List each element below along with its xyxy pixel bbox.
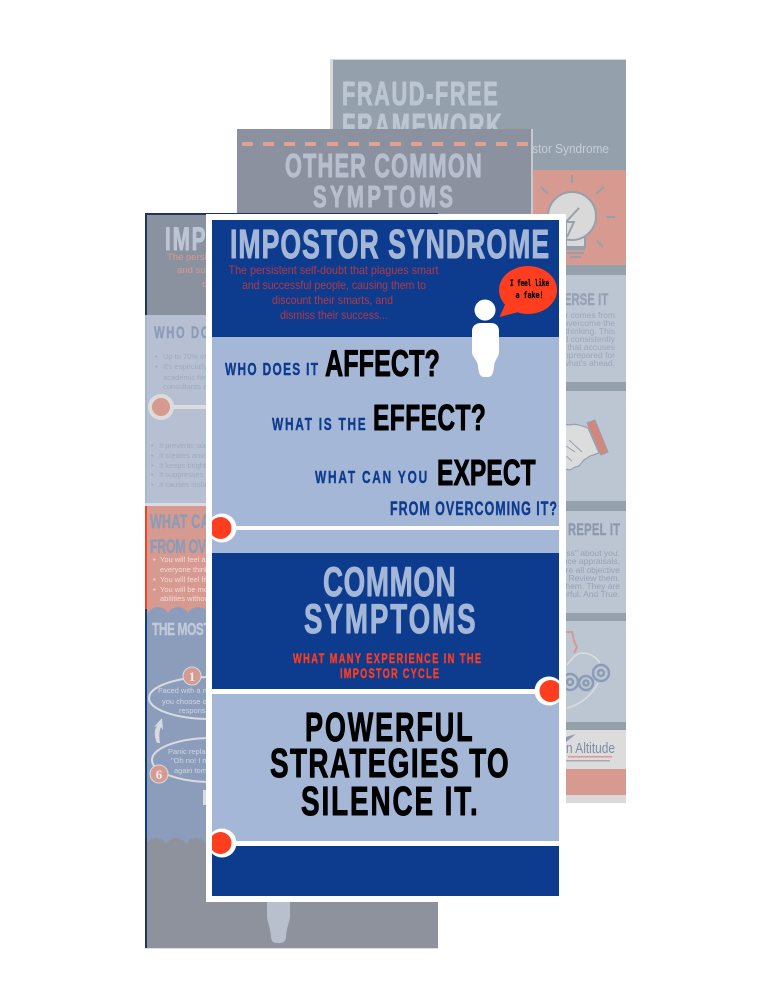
text block: reverse it: that accuses xyxy=(567,342,615,352)
question: who does it affect: WHO DOES IT xyxy=(225,360,319,380)
text block: repel it: re all objective xyxy=(566,565,620,575)
text block: definition: dismiss their success... xyxy=(280,308,388,322)
heading: fraud-free framework xyxy=(342,75,502,144)
text block: effect bullets: • xyxy=(151,470,154,479)
text block: reverse it: or comes from xyxy=(561,310,615,320)
text block: expect bullets: • xyxy=(153,575,156,584)
heading: powerful strategies: STRATEGIES TO xyxy=(270,741,509,786)
back page: fraud-free framework xyxy=(330,59,626,803)
text block: affect bullets: It's especially prevalent xyxy=(163,362,241,371)
panel: faded impostor cycle: THE MOST COMMON xyxy=(152,620,267,640)
text block: affect bullets: • xyxy=(155,352,158,361)
panel: faded what can you expect xyxy=(145,506,438,615)
title: IMPOSTOR SYNDROME xyxy=(230,222,549,267)
panel: reverse it: ERSE IT xyxy=(564,291,608,310)
text block: effect bullets: It suppresses xyxy=(159,470,204,479)
front page: impostor syndrome card xyxy=(206,214,566,902)
logo: altitude xyxy=(333,730,626,769)
icon: lightbulb xyxy=(541,175,615,257)
text block: effect bullets: It keeps bright xyxy=(159,461,207,470)
panel: faded what can you expect: WHAT CAN YOU xyxy=(150,511,250,533)
panel: faded who does it affect: WHO DOES IT xyxy=(154,324,246,343)
text block: effect bullets: • xyxy=(151,461,154,470)
text block: expect bullets xyxy=(153,555,215,603)
cycle step 6: "Oh no! I must xyxy=(171,756,220,765)
text block: reverse it: thinking. This xyxy=(565,326,615,336)
cycle step 6: again tomorrow xyxy=(174,766,226,775)
timeline marker: first xyxy=(212,514,236,542)
timeline marker xyxy=(148,394,221,420)
panel: faded footer xyxy=(145,838,438,948)
logo: altitude: n Altitude xyxy=(566,740,615,757)
panel: handshake xyxy=(333,391,626,501)
heading: fraud-free framework: FRAMEWORK xyxy=(342,107,502,144)
text block: reverse it xyxy=(561,310,616,368)
text block: repel it: erful. And True. xyxy=(562,589,620,599)
question: what can you expect: FROM OVERCOMING IT? xyxy=(390,498,557,520)
panel: repel it: REPEL IT xyxy=(568,521,620,540)
panel: common symptoms xyxy=(212,553,559,689)
panel: faded header: The persistent self-doubt xyxy=(167,252,272,263)
heading: common symptoms: SYMPTOMS xyxy=(304,595,476,642)
text block: reverse it: what's ahead. xyxy=(562,358,615,368)
cycle step 1: you choose one xyxy=(162,697,215,706)
text block: expect bullets: You will be more xyxy=(160,585,215,594)
question: who does it affect xyxy=(225,342,440,384)
text block: affect bullets: consultants and xyxy=(163,382,216,391)
panel: faded impostor cycle xyxy=(145,607,438,846)
text block: definition: discount their smarts, and xyxy=(272,293,393,307)
text block: effect bullets: It creates anxiety xyxy=(159,451,216,460)
icon: person xyxy=(472,300,499,377)
band: lightbulb xyxy=(333,170,626,265)
text block: affect bullets: academic fields xyxy=(163,373,215,382)
cycle step 6 xyxy=(150,738,272,783)
panel: faded what can you expect: FROM OVERCOMING xyxy=(150,536,272,558)
icon: faded figure xyxy=(267,895,290,943)
text block: expect bullets: everyone thinks xyxy=(160,565,213,574)
text block: effect bullets: • xyxy=(151,441,154,450)
text block: reverse it: nprepared for xyxy=(564,350,615,360)
arrow xyxy=(154,718,163,743)
cycle step 6: 6 xyxy=(156,767,163,782)
text block: repel it: n. Review them. xyxy=(559,573,620,583)
callout: speech bubble xyxy=(499,266,557,317)
text block: expect bullets: You will feel as xyxy=(160,555,210,564)
text block: definition: The persistent self-doubt that plagues smart xyxy=(228,263,439,277)
text block: repel it xyxy=(559,548,620,599)
icon: heart with swirls xyxy=(562,632,609,708)
text block: definition xyxy=(228,263,439,322)
text block: affect bullets: • xyxy=(155,362,158,371)
panel: faded header xyxy=(145,213,438,315)
question: who does it affect: AFFECT? xyxy=(325,342,440,384)
text block: effect bullets xyxy=(151,441,223,489)
heading: other common symptoms: OTHER COMMON xyxy=(285,147,482,184)
cycle step 1 xyxy=(149,667,271,719)
panel: header xyxy=(212,220,559,337)
callout: speech bubble: a fake! xyxy=(516,291,544,301)
text block: effect bullets: • xyxy=(151,480,154,489)
subtitle: Overcoming Impostor Syndrome xyxy=(439,141,609,156)
heading: other common symptoms xyxy=(285,147,482,214)
dashed divider xyxy=(242,142,528,146)
heading: powerful strategies: POWERFUL xyxy=(305,706,473,750)
text block: expect bullets: You will feel free xyxy=(160,575,214,584)
text block: effect bullets: • xyxy=(151,451,154,460)
panel: faded header: discount xyxy=(202,279,238,290)
panel: questions xyxy=(212,337,559,526)
text block: effect bullets: It causes isolation xyxy=(159,480,219,489)
subheading xyxy=(293,650,481,682)
cycle step 1: response xyxy=(179,706,210,715)
panel: faded who does it affect xyxy=(145,315,438,503)
panel: repel it xyxy=(333,511,626,613)
text block: expect bullets: abilities without xyxy=(160,594,212,603)
callout: speech bubble: I feel like xyxy=(510,278,549,289)
heading: powerful strategies xyxy=(270,706,509,824)
heading: other common symptoms: SYMPTOMS xyxy=(313,179,453,214)
text block: reverse it: overcome the xyxy=(564,318,615,328)
text block: effect bullets: It prevents success xyxy=(159,441,223,450)
question: what is the effect: EFFECT? xyxy=(373,397,486,438)
text block: affect bullets: Up to 70% of people xyxy=(163,352,231,361)
panel: faded header: and successful people xyxy=(177,265,271,276)
question: what is the effect: WHAT IS THE xyxy=(272,415,366,435)
panel: heart xyxy=(333,621,626,722)
heading: common symptoms: COMMON xyxy=(323,558,456,605)
question: what is the effect xyxy=(272,397,486,438)
subheading: WHAT MANY EXPERIENCE IN THE xyxy=(293,650,481,667)
back page: impostor syndrome faded xyxy=(145,213,438,949)
text block: repel it: nce appraisals, xyxy=(563,556,620,566)
subheading: IMPOSTOR CYCLE xyxy=(340,665,439,682)
panel: bottom band xyxy=(212,846,559,896)
cycle step 1: Faced with a new xyxy=(158,686,217,695)
text block: definition: and successful people, causing them to xyxy=(242,278,426,292)
heading: fraud-free framework: FRAUD-FREE xyxy=(342,75,498,112)
question: what can you expect: WHAT CAN YOU xyxy=(315,468,427,488)
text block: expect bullets: • xyxy=(153,555,156,564)
timeline marker: second xyxy=(534,676,559,706)
cycle step 1: 1 xyxy=(189,669,195,684)
panel: faded header: IMPOSTOR SYNDROME xyxy=(165,222,430,257)
text block: expect bullets: • xyxy=(153,585,156,594)
panel: reverse it xyxy=(333,275,626,382)
text block: repel it: ss" about you. xyxy=(566,548,620,558)
icon: handshake xyxy=(560,420,608,470)
back page: other common symptoms xyxy=(237,129,533,219)
text block: repel it: them. They are xyxy=(563,581,620,591)
text block: reverse it: d consistently xyxy=(564,334,616,344)
question: what can you expect xyxy=(315,452,557,520)
heading: common symptoms xyxy=(304,558,476,642)
cycle step 6: Panic replaces xyxy=(168,747,217,756)
heading: powerful strategies: SILENCE IT. xyxy=(301,779,478,824)
question: what can you expect: EXPECT xyxy=(437,452,536,493)
text block: affect bullets xyxy=(155,352,241,391)
panel: powerful strategies xyxy=(212,694,559,841)
timeline marker: third xyxy=(212,828,236,858)
